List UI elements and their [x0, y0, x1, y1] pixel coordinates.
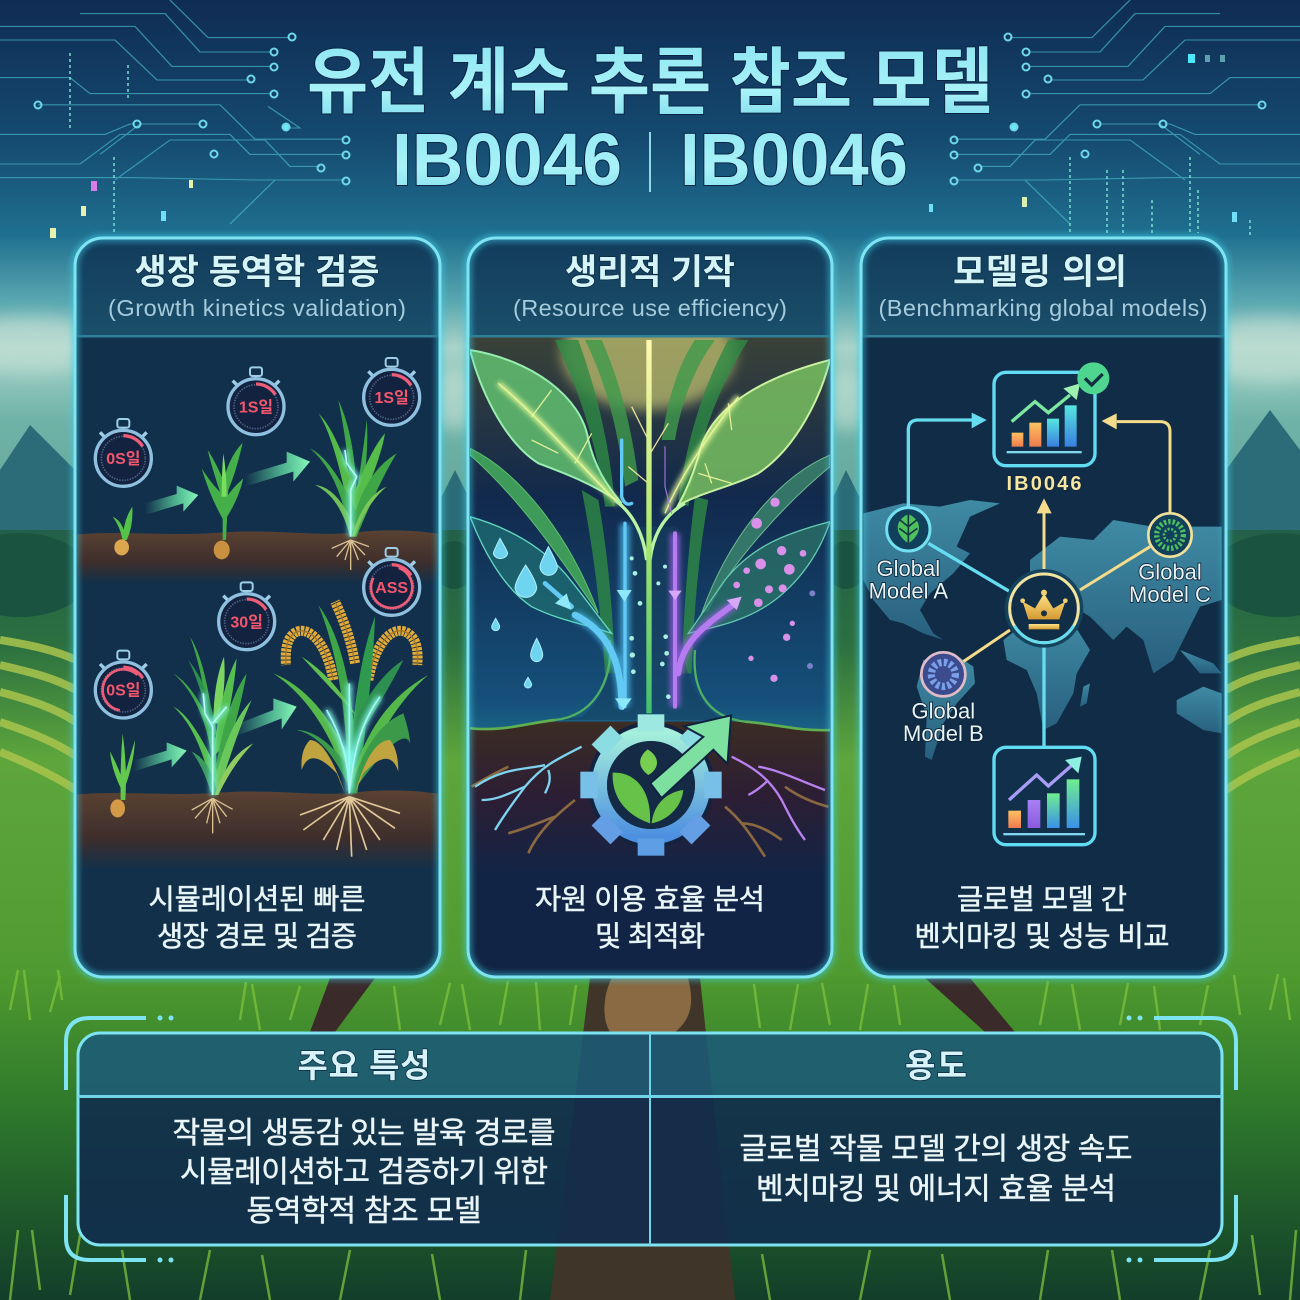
background: circuit traces left: [0, 0, 345, 224]
stopwatch 15 days: 1S일: [239, 398, 273, 416]
table header row: [78, 1033, 1222, 1096]
connector lines gold: [963, 422, 1170, 662]
stopwatch 30 days: 30일: [230, 613, 263, 631]
gear icon: [580, 714, 730, 856]
stopwatch 0 days upper: 0S일: [106, 450, 140, 468]
background: tree line: [0, 533, 1300, 617]
background: grass blades: [10, 970, 1296, 1300]
top glow: [554, 338, 743, 418]
column heading: usage: 용도: [905, 1047, 967, 1084]
stopwatch 0 days lower: 0S일: [106, 682, 140, 700]
leaf top left: [470, 350, 622, 503]
panel base: [468, 238, 832, 977]
node global model B: [921, 652, 965, 696]
background: terraces: [0, 640, 1300, 790]
connector lines blue: [908, 420, 1044, 747]
key features text: 시뮬레이션하고 검증하기 위한: [180, 1156, 548, 1189]
usage text: 글로벌 작물 모델 간의 생장 속도: [740, 1133, 1132, 1166]
blue channel arrows: [555, 590, 632, 710]
node global model C: [1148, 513, 1192, 557]
key features text: 작물의 생동감 있는 발육 경로를: [172, 1117, 556, 1150]
header separator: [470, 335, 830, 338]
leaf veins glow: [498, 383, 738, 513]
caption: 글로벌 모델 간: [957, 884, 1127, 916]
title divider: [649, 132, 651, 192]
panel header: [861, 238, 1226, 337]
panel base: [861, 238, 1226, 977]
bracket dots: [158, 1016, 1142, 1262]
caption line 2: 및 최적화: [595, 921, 705, 953]
trunk body: [555, 527, 745, 720]
panel art: plant physiology: [470, 338, 830, 858]
header separator: [77, 335, 438, 338]
label global model B: [903, 698, 984, 746]
title line 2 left code: IB0046: [392, 118, 622, 201]
panel frame: [468, 238, 832, 977]
panel frame line: [468, 238, 832, 977]
background: dirt paths: [310, 978, 1015, 1300]
label global model A: Global: [877, 556, 940, 581]
soil: [470, 722, 832, 873]
background: mountains: [0, 410, 1300, 560]
water drops: [492, 538, 557, 688]
panel header: [468, 238, 832, 337]
central xylem glow: [631, 340, 667, 713]
label IB0046: IB0046: [1006, 473, 1081, 495]
central line: [646, 340, 652, 713]
header separator: [863, 335, 1224, 338]
purple channel arrows: [668, 591, 742, 610]
background: clouds: [0, 317, 1300, 430]
leaf veins: [498, 373, 738, 513]
stopwatch 30 days: [219, 582, 275, 650]
key features text: [172, 1117, 556, 1228]
nutrient dots: [733, 498, 815, 682]
stopwatch 0 days lower: [95, 651, 151, 718]
heading: 생리적 기작: [565, 253, 735, 292]
trunk outline: [555, 640, 745, 722]
seedling day 0 lower: [110, 733, 135, 817]
column divider: [649, 1033, 651, 1245]
crown hub: [1005, 569, 1083, 648]
label global model C: [1129, 559, 1211, 607]
title: [307, 43, 993, 201]
target chart box: [994, 372, 1095, 466]
panel frame: [861, 238, 1226, 977]
mature rice plant: [273, 602, 428, 857]
panel header: [75, 238, 440, 337]
panel frame line: [75, 238, 440, 977]
purple roots: [732, 757, 825, 840]
upper branches: [615, 500, 685, 560]
growth arrows: [133, 452, 310, 772]
background: data streams and sparkles: [50, 53, 1250, 238]
caption: 자원 이용 효율 분석: [535, 884, 765, 916]
panel art: growth stages: [70, 337, 445, 877]
usage text: 벤치마킹 및 에너지 효율 분석: [756, 1173, 1116, 1206]
panel: resource use efficiency: [468, 238, 832, 977]
label global model B: Global: [912, 698, 975, 723]
arrowheads: [972, 413, 1117, 513]
leaf lower right: [688, 522, 830, 633]
background: fields: [0, 530, 1300, 990]
blue channel glow: [575, 523, 625, 707]
label global model A: Model A: [869, 579, 948, 604]
leaf middle left: [470, 448, 598, 613]
panel base: [75, 238, 440, 977]
caption line 2: 생장 경로 및 검증: [157, 921, 357, 953]
subheading: (Benchmarking global models): [878, 295, 1208, 321]
summary table: [66, 1016, 1236, 1262]
purple channel: [665, 447, 735, 707]
phloem dots: [629, 556, 671, 699]
panel art: global benchmark diagram: [863, 362, 1222, 845]
heading: 모델링 의의: [953, 253, 1127, 292]
table body row: [78, 1096, 1222, 1245]
blue roots: [475, 747, 582, 830]
table border: [78, 1033, 1222, 1245]
header divider: [78, 1095, 1222, 1098]
background: circuit nodes right: [950, 34, 1266, 184]
benchmark chart box: [994, 747, 1095, 845]
leaf middle right: [702, 455, 830, 613]
background: circuit nodes left: [34, 34, 350, 184]
panel frame line: [861, 238, 1226, 977]
node global model A: [887, 508, 930, 551]
subheading: (Resource use efficiency): [513, 295, 787, 321]
caption line 2: 벤치마킹 및 성능 비교: [914, 921, 1170, 953]
plant lower middle: [173, 637, 253, 833]
ground line: [470, 720, 832, 730]
stopwatch 45 days: ASS: [375, 580, 408, 597]
stopwatch 45 days: [364, 548, 420, 615]
usage text: [740, 1133, 1132, 1206]
seedling day 0 upper: [113, 507, 132, 555]
check badge: [1077, 362, 1109, 394]
key features text: 동역학적 참조 모델: [246, 1195, 482, 1228]
panel frame: [75, 238, 440, 977]
soil upper: [77, 530, 438, 580]
leaf lower left: [470, 517, 612, 633]
column heading: key features: 주요 특성: [298, 1047, 430, 1084]
label global model A: [869, 556, 948, 604]
leaf top right: [678, 360, 830, 505]
purple channel glow: [675, 533, 735, 707]
background: grass foreground: [0, 975, 1300, 1300]
background: sky: [0, 0, 1300, 560]
background: circuit traces right: [955, 0, 1300, 224]
stopwatch 15 days right: [364, 358, 420, 425]
title line 1: 유전 계수 추론 참조 모델: [307, 43, 993, 123]
stopwatch 15 days right: 1S일: [375, 389, 409, 407]
stopwatch 15 days: [228, 367, 284, 435]
outer bracket frame: [66, 1018, 1236, 1260]
stopwatch 0 days upper: [95, 419, 151, 486]
panel: benchmarking global models: [861, 238, 1226, 977]
blue channel: [545, 440, 632, 707]
label global model C: Model C: [1129, 582, 1211, 607]
title line 2 right code: IB0046: [680, 118, 908, 201]
upper stems: [555, 340, 748, 673]
world map: [863, 500, 1222, 760]
tan roots: [472, 767, 828, 857]
plant upper right: [310, 400, 397, 570]
seedling day 15: [202, 443, 243, 559]
soil lower: [77, 790, 438, 864]
panel: growth kinetics validation: [70, 238, 445, 977]
subheading: (Growth kinetics validation): [108, 295, 406, 321]
caption: 시뮬레이션된 빠른: [148, 884, 366, 916]
label global model C: Global: [1138, 559, 1202, 584]
label global model B: Model B: [903, 721, 984, 746]
heading: 생장 동역학 검증: [134, 253, 380, 292]
